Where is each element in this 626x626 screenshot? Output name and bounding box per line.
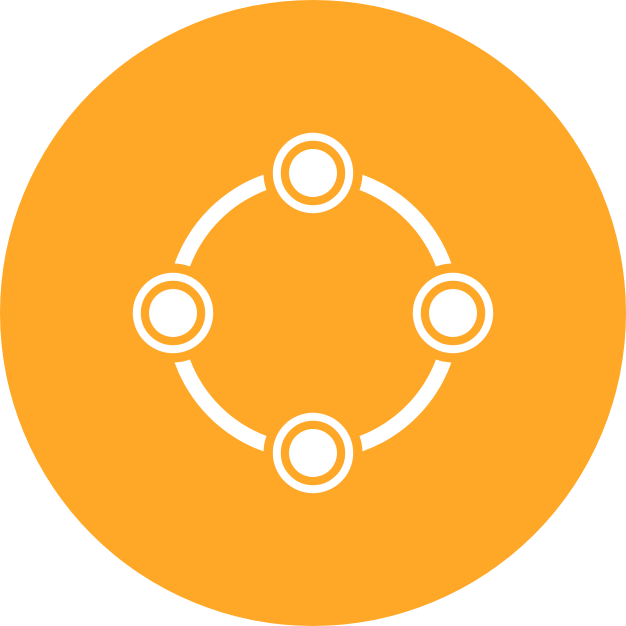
node: right: [417, 277, 489, 349]
node: top: [277, 137, 349, 209]
node: bottom: [277, 417, 349, 489]
arc: bottom left: [175, 360, 266, 451]
arc: top left: [175, 175, 266, 266]
node: left: [137, 277, 209, 349]
arc: top right: [360, 175, 451, 266]
arc: bottom right: [360, 360, 451, 451]
ring arcs: [175, 175, 451, 451]
